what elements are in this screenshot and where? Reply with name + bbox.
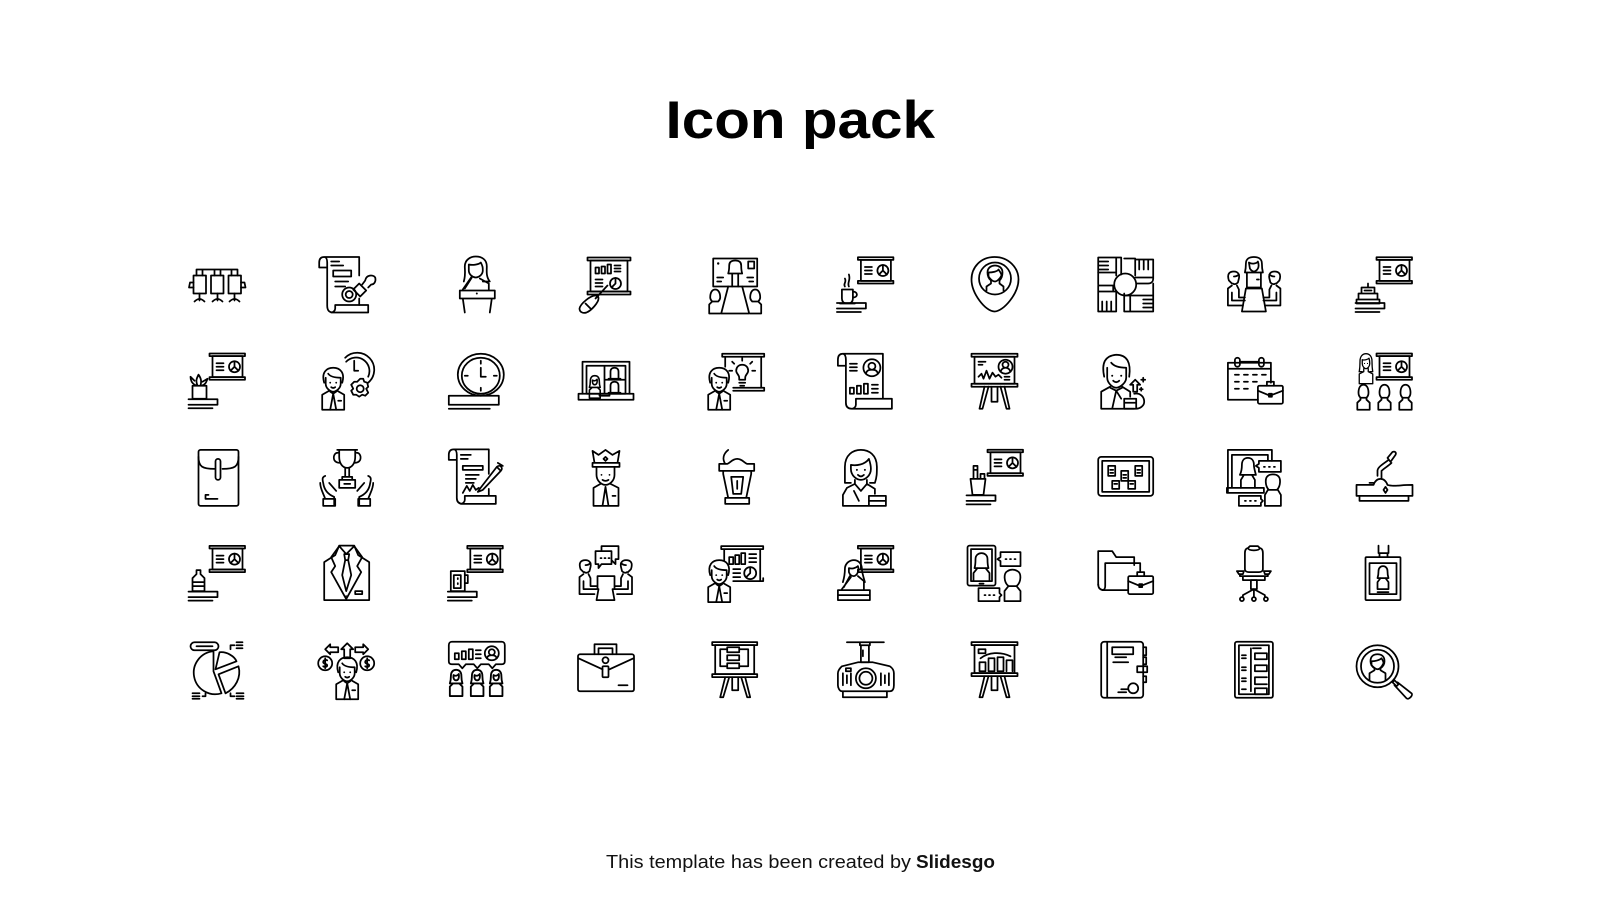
icon: location pin with person xyxy=(972,257,1018,312)
icon: board with cake xyxy=(1356,257,1412,312)
icon: team around a table xyxy=(1228,257,1280,312)
icon: calendar with briefcase xyxy=(1228,358,1283,404)
icon: presentation board with pointer hand xyxy=(580,258,630,313)
icon: man with decisions and coins xyxy=(318,643,374,699)
footer credit: Slidesgo xyxy=(916,852,995,872)
icon: pie chart with labels xyxy=(190,642,244,699)
icon: signed contract with pen xyxy=(449,449,503,504)
icon: board with pen cup xyxy=(966,450,1023,504)
icon: video conference with table xyxy=(709,258,761,314)
icon: man with idea board xyxy=(708,354,764,410)
icon: laptop video call xyxy=(578,362,634,400)
icon: desk microphone xyxy=(1356,452,1412,501)
footer credit: This template has been created by xyxy=(606,852,911,872)
icon: certificate with stamp xyxy=(319,257,375,312)
icon: woman at lectern xyxy=(460,256,495,312)
icon: meeting with speech bubbles xyxy=(580,546,632,600)
icon: video chat with laptop xyxy=(1227,450,1281,506)
title: Icon pack xyxy=(666,91,936,150)
icon: notebook xyxy=(1101,642,1147,698)
icon: phone chat xyxy=(968,546,1020,601)
icon: woman presenting to an audience xyxy=(1357,354,1412,410)
icon: board with device xyxy=(448,546,503,601)
icon: kanban board xyxy=(1098,457,1153,496)
icon grid xyxy=(188,256,1412,699)
icon: audience with chart bubble xyxy=(449,642,505,696)
icon: easel with bar chart xyxy=(972,642,1018,697)
icon: trophy between hands xyxy=(320,450,373,506)
icon: man with crown xyxy=(592,450,620,506)
icon: ID badge xyxy=(1366,546,1400,600)
icon: folder with briefcase xyxy=(1098,551,1153,594)
icon: easel with line chart xyxy=(972,354,1018,409)
icon: woman with books xyxy=(843,450,886,506)
icon: document envelope xyxy=(198,450,238,506)
icon: tablet checklist xyxy=(1235,642,1273,698)
icon: report scroll with charts xyxy=(838,354,892,409)
icon: woman at desk with board xyxy=(838,546,893,600)
icon: suit jacket xyxy=(324,546,369,600)
icon: easel with flow diagram xyxy=(712,642,757,697)
icon: office chair xyxy=(1237,546,1271,601)
icon: podium with microphone xyxy=(719,450,754,504)
icon: board with plant xyxy=(188,354,245,408)
icon: ceiling projector xyxy=(838,642,894,697)
icon: wall clock on shelf xyxy=(449,354,504,409)
icon: man with analytics board xyxy=(708,546,763,602)
icon: briefcase xyxy=(578,644,634,691)
icon: four joined hands xyxy=(1098,258,1153,312)
icon: man with growth arrow xyxy=(1101,355,1145,409)
icon: magnifier over person xyxy=(1356,645,1412,699)
icon: board with water bottle xyxy=(188,546,245,601)
icon: man with clock and gear xyxy=(322,353,374,410)
icon: row of meeting chairs xyxy=(189,270,246,302)
icon: board with coffee cup xyxy=(837,257,893,312)
